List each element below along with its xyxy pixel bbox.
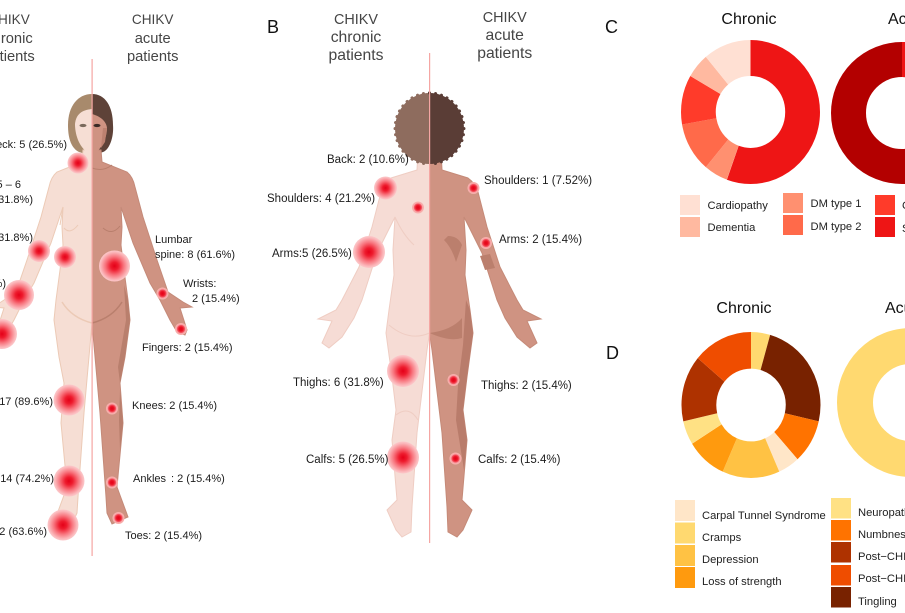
legend: symptoms column 1: Carpal Tunnel Syndrome bbox=[702, 510, 826, 522]
labels: front acute: 2 (15.4%) bbox=[192, 293, 240, 305]
divider line B bbox=[429, 53, 430, 543]
heading: CHIKV chronic patients (back): chronic bbox=[331, 29, 381, 46]
donut chart: chronic symptoms bbox=[677, 328, 825, 482]
labels: front chronic: 14 (74.2%) bbox=[0, 473, 54, 485]
labels: back chronic: Shoulders: 4 (21.2%) bbox=[267, 193, 375, 205]
pain hot spots: front acute bbox=[99, 250, 187, 524]
legend: symptoms column 1: Cramps bbox=[702, 532, 742, 544]
labels: front chronic: 2 (63.6%) bbox=[0, 526, 47, 538]
divider line A bbox=[92, 59, 93, 556]
labels: front acute: Ankles bbox=[133, 473, 166, 485]
labels: back chronic: Back: 2 (10.6%) bbox=[327, 154, 409, 166]
figure: front body, chronic half bbox=[0, 94, 92, 524]
legend: symptoms column 1: Loss of strength bbox=[702, 576, 782, 588]
heading: CHIKV acute patients (back): patients bbox=[477, 45, 532, 62]
heading: CHIKV acute patients (front): acute bbox=[135, 31, 171, 47]
panel B: back body map bbox=[267, 10, 592, 543]
donut chart: acute symptoms bbox=[855, 346, 905, 459]
labels: back chronic: Calfs: 5 (26.5%) bbox=[306, 454, 389, 466]
panel letter D: D bbox=[606, 343, 619, 363]
labels: back acute: Calfs: 2 (15.4%) bbox=[478, 454, 561, 466]
figure: back body, acute half bbox=[430, 93, 541, 537]
pain hot spots: back acute bbox=[448, 182, 492, 464]
heading: CHIKV acute patients (back): acute bbox=[486, 27, 524, 44]
legend: symptoms column 1 bbox=[675, 500, 826, 588]
labels: back chronic bbox=[267, 154, 409, 466]
panel C: comorbidities donuts bbox=[605, 11, 905, 237]
legend: symptoms column 2: Tingling bbox=[858, 596, 897, 608]
panel letter B: B bbox=[267, 17, 279, 37]
labels: back chronic: Arms:5 (26.5%) bbox=[272, 248, 352, 260]
labels: front acute: spine: 8 (61.6%) bbox=[155, 249, 235, 261]
heading: CHIKV acute patients (front): CHIKV bbox=[132, 12, 173, 27]
labels: front acute: Lumbar bbox=[155, 234, 193, 246]
labels: back acute: Shoulders: 1 (7.52%) bbox=[484, 175, 592, 187]
legend: comorbidities bbox=[680, 193, 905, 237]
legend: comorbidities: Cardiopathy bbox=[708, 200, 768, 212]
figure: back body, chronic half bbox=[318, 93, 430, 537]
legend: comorbidities: DM type 2 bbox=[810, 221, 861, 233]
heading: Chronic (C): Chronic bbox=[721, 11, 777, 28]
heading: CHIKV chronic patients (back): CHIKV bbox=[334, 12, 378, 28]
panel letter C: C bbox=[605, 17, 618, 37]
labels: back acute bbox=[478, 175, 592, 466]
labels: front chronic: 17 (89.6%) bbox=[0, 396, 53, 408]
labels: back acute: Arms: 2 (15.4%) bbox=[499, 234, 582, 246]
legend: symptoms column 1: Depression bbox=[702, 554, 759, 566]
labels: front acute bbox=[125, 234, 240, 542]
panel D: symptoms donuts bbox=[606, 300, 905, 608]
legend: symptoms column 2 bbox=[831, 498, 905, 608]
figure: front body, acute half bbox=[92, 94, 192, 524]
legend: comorbidities: Dementia bbox=[708, 222, 756, 234]
labels: front acute: : 2 (15.4%) bbox=[171, 473, 225, 485]
pain hot spots: front chronic bbox=[0, 152, 88, 540]
labels: front acute: Knees: 2 (15.4%) bbox=[132, 400, 217, 412]
heading: Chronic (D): Chronic bbox=[716, 300, 772, 317]
donut chart: acute comorbidities bbox=[848, 42, 905, 166]
labels: back chronic: Thighs: 6 (31.8%) bbox=[293, 377, 384, 389]
labels: back acute: Thighs: 2 (15.4%) bbox=[481, 380, 572, 392]
labels: front acute: Toes: 2 (15.4%) bbox=[125, 530, 202, 542]
heading: CHIKV chronic patients (back): patients bbox=[329, 47, 384, 64]
heading: CHIKV acute patients (back): CHIKV bbox=[483, 10, 527, 26]
donut chart: chronic comorbidities bbox=[677, 36, 824, 188]
labels: front chronic bbox=[0, 139, 67, 538]
legend: comorbidities: DM type 1 bbox=[810, 198, 861, 210]
panel A: front body map bbox=[0, 12, 240, 556]
pain hot spots: back chronic bbox=[353, 176, 424, 474]
heading: CHIKV acute patients (front): patients bbox=[127, 49, 178, 65]
labels: front acute: Wrists: bbox=[183, 278, 216, 290]
labels: front acute: Fingers: 2 (15.4%) bbox=[142, 342, 232, 354]
